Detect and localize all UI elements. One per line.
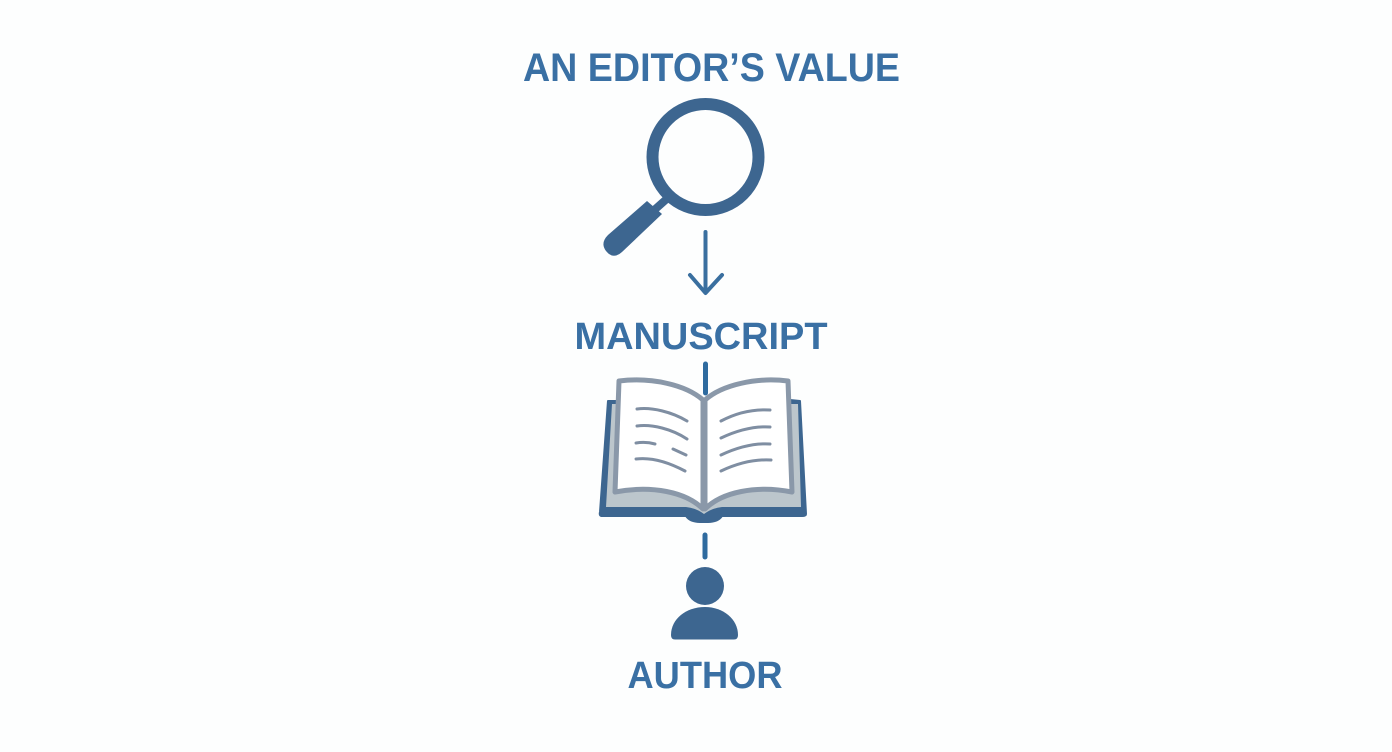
icon: open book	[600, 380, 806, 522]
arrow: magnifier to manuscript	[690, 232, 722, 293]
title: AN EDITOR’S VALUE	[523, 46, 900, 90]
heading: manuscript: MANUSCRIPT	[574, 316, 828, 358]
connector: manuscript to book	[703, 364, 708, 393]
page block	[606, 404, 801, 514]
text lines	[636, 409, 771, 471]
icon: magnifying glass	[603, 104, 758, 256]
book cover	[600, 400, 806, 522]
connector: book to author	[702, 535, 708, 557]
pages	[615, 380, 792, 509]
heading: author: AUTHOR	[628, 655, 782, 697]
icon: person	[671, 567, 738, 640]
